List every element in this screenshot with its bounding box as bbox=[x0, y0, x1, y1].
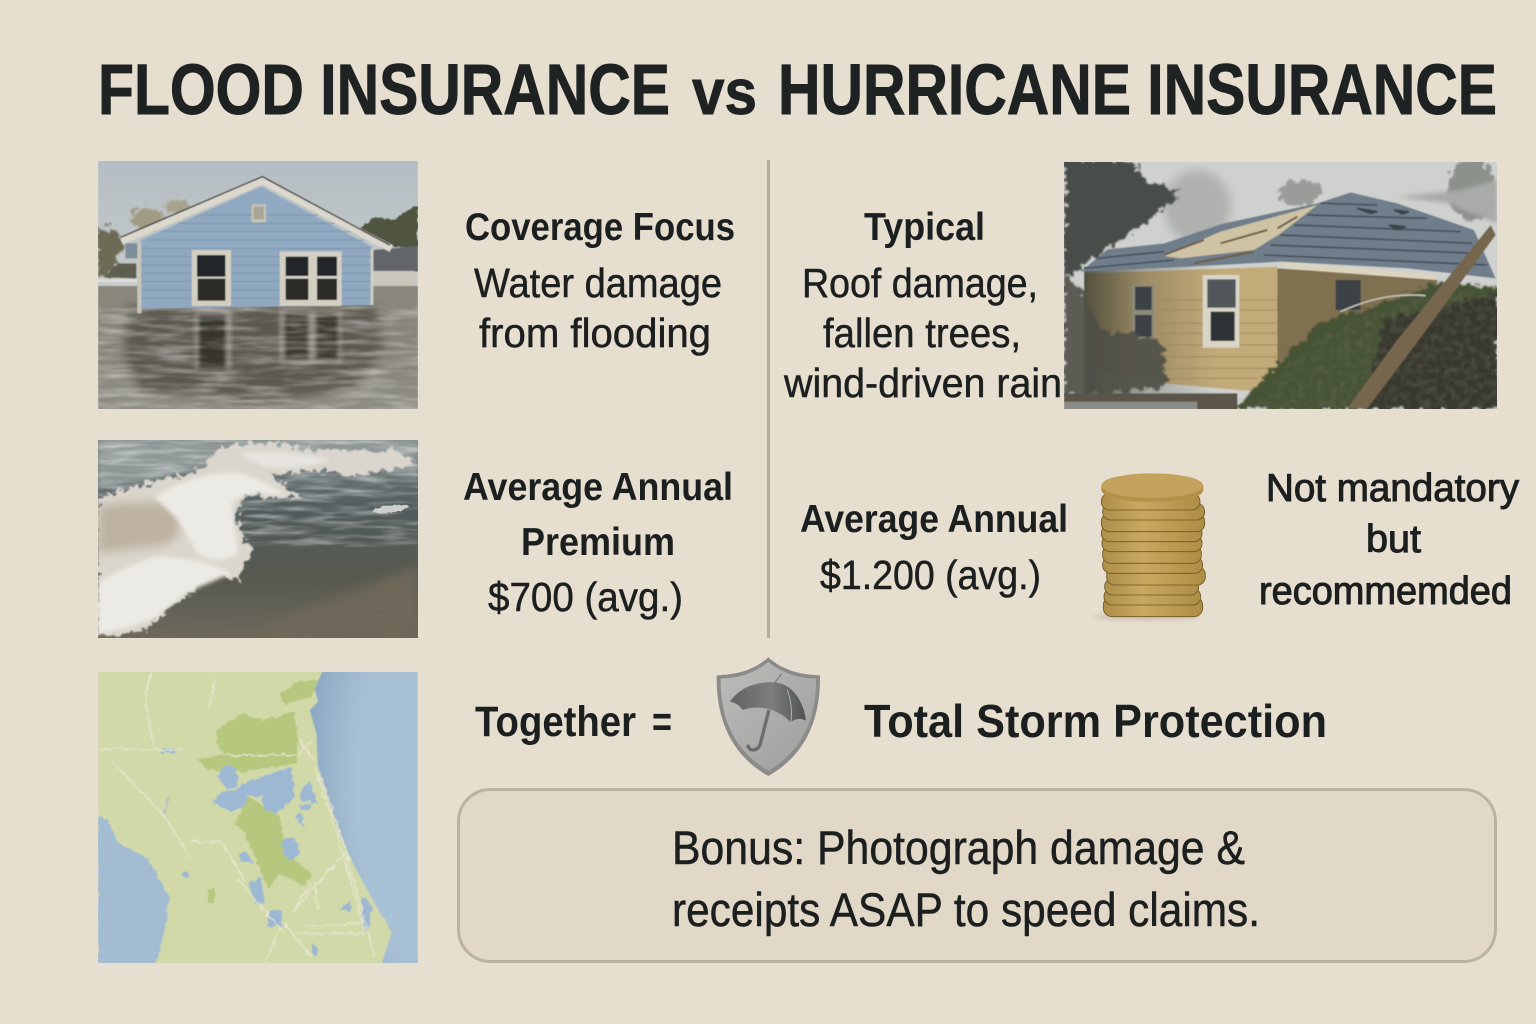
text: not mandatory note: but bbox=[1366, 518, 1421, 561]
callout: bonus tip: Bonus: Photograph damage & bbox=[672, 821, 1245, 874]
text: not mandatory note: Not mandatory bbox=[1266, 467, 1519, 510]
callout: bonus tip: receipts ASAP to speed claims. bbox=[672, 883, 1260, 936]
text: hurricane premium: Average Annual bbox=[800, 498, 1068, 541]
text: flood premium: $700 (avg.) bbox=[488, 574, 683, 620]
title: vs bbox=[692, 56, 757, 128]
text: hurricane typical: fallen trees, bbox=[823, 310, 1021, 356]
text: flood coverage focus: Coverage Focus bbox=[465, 206, 735, 249]
text: flood premium: Premium bbox=[521, 521, 675, 564]
text: hurricane typical: Typical bbox=[864, 206, 985, 249]
text: flood premium bbox=[463, 466, 733, 620]
text: flood premium: Average Annual bbox=[463, 466, 733, 509]
text: hurricane typical bbox=[783, 206, 1062, 406]
icon: shield with umbrella bbox=[717, 657, 820, 776]
photo: Florida map bbox=[98, 670, 418, 965]
text: hurricane typical: Roof damage, bbox=[802, 260, 1038, 306]
text: hurricane typical: wind-driven rain bbox=[783, 360, 1062, 406]
icon: coin stack bbox=[1093, 473, 1205, 621]
title bbox=[98, 51, 1497, 130]
text: together equals: Together bbox=[475, 698, 636, 746]
text: together equals: = bbox=[652, 698, 672, 746]
text: flood coverage focus bbox=[465, 206, 735, 356]
text: hurricane premium bbox=[800, 498, 1068, 598]
text: hurricane premium: $1.200 (avg.) bbox=[820, 552, 1041, 598]
photo: storm wave bbox=[98, 440, 418, 640]
text: flood coverage focus: Water damage bbox=[474, 260, 722, 306]
text: total storm protection: Total Storm Protection bbox=[864, 695, 1327, 747]
text: not mandatory note bbox=[1259, 467, 1519, 613]
title: FLOOD INSURANCE bbox=[98, 51, 670, 130]
divider bbox=[767, 160, 770, 638]
photo: flooded house bbox=[98, 160, 418, 410]
callout: bonus tip bbox=[458, 790, 1496, 962]
photo: hurricane damaged house bbox=[1064, 160, 1498, 410]
text: flood coverage focus: from flooding bbox=[479, 310, 711, 356]
text: not mandatory note: recommemded bbox=[1259, 570, 1512, 613]
